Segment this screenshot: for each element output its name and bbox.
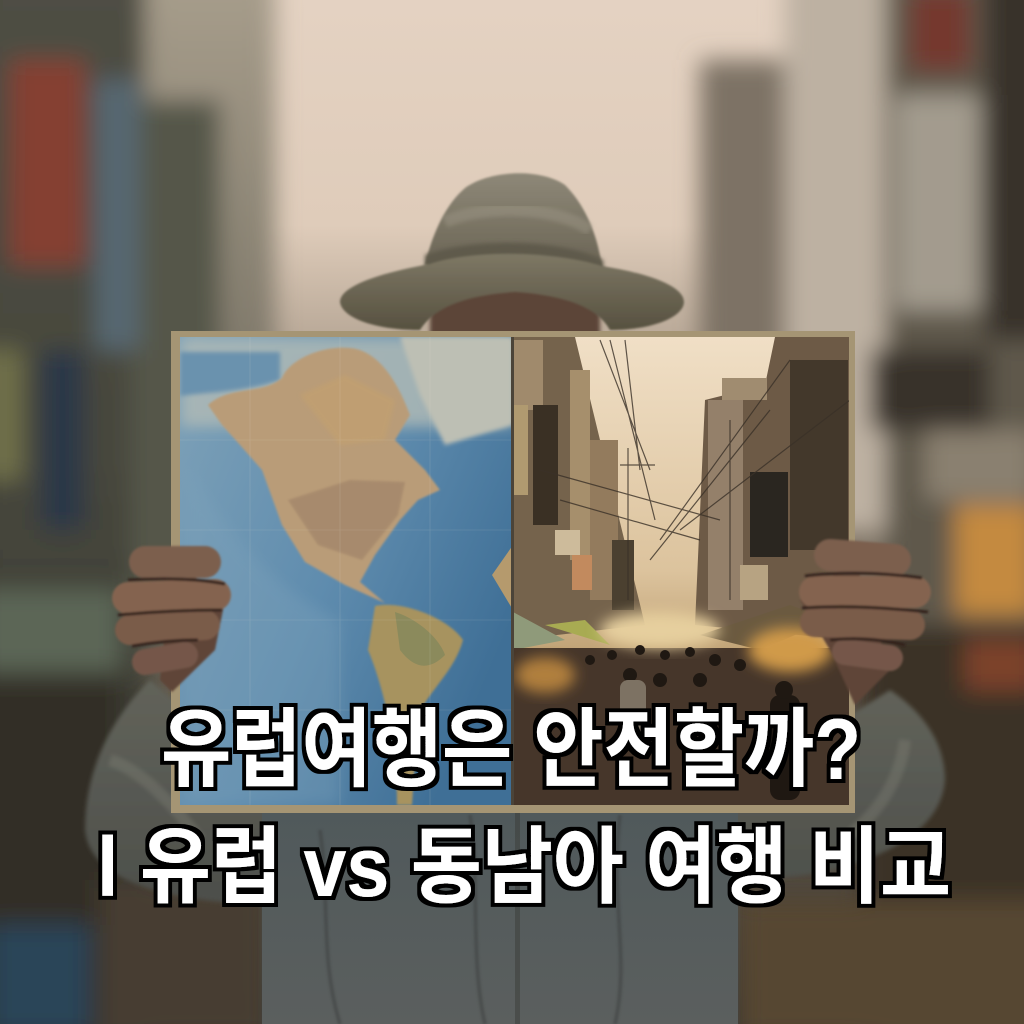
market awnings	[513, 612, 565, 650]
left hand	[118, 560, 225, 692]
market crowd	[513, 648, 849, 805]
right page: Asian street photo	[513, 337, 850, 805]
title line 2: l 유럽 vs 동남아 여행 비교	[97, 820, 951, 914]
right hand	[800, 555, 928, 705]
person: coat and torso	[85, 680, 945, 1024]
person: face under the hat	[430, 285, 600, 340]
book cover edge	[171, 331, 855, 813]
title line 1: 유럽여행은 안전할까?	[161, 702, 861, 798]
open book	[171, 331, 855, 813]
hat	[340, 173, 684, 330]
spine shadow	[511, 337, 514, 805]
left page: world map	[180, 337, 513, 805]
